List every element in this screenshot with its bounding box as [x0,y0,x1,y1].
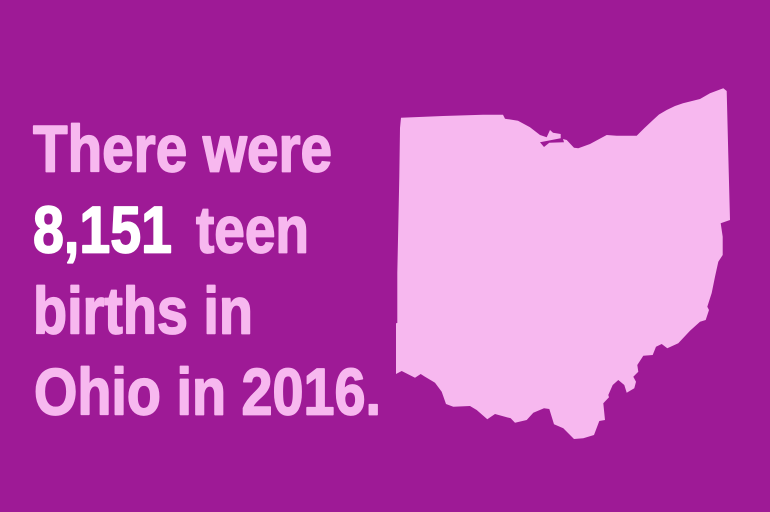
word: teen: teen [196,192,309,266]
highlighted number: 8,151 [33,192,172,266]
headline text [33,112,381,428]
map of Ohio [396,88,730,439]
line: There were: There were [33,112,332,186]
line: births in: births in [33,274,253,348]
line: Ohio in 2016.: Ohio in 2016. [34,354,381,428]
line: 8,151 teen [33,192,309,266]
